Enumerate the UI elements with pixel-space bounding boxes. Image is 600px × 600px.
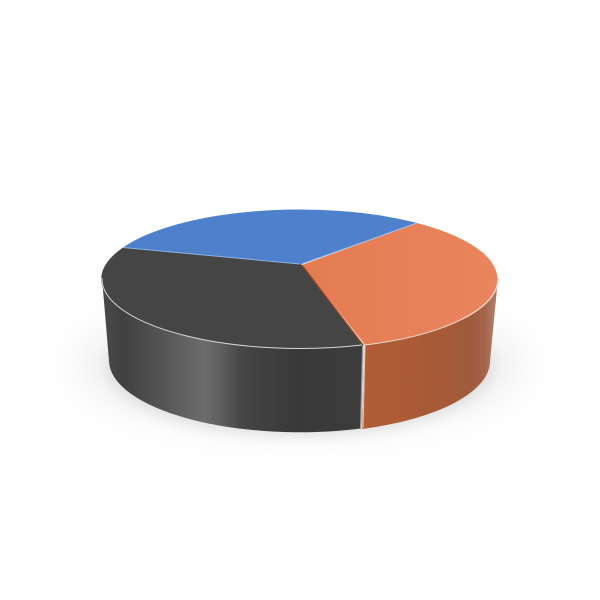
top face: blue slice: [123, 209, 417, 264]
top face: orange slice: [302, 223, 497, 344]
ground shadow: [75, 296, 525, 436]
side wall: orange slice: [362, 278, 498, 429]
slice edge highlights: [102, 223, 498, 428]
slice seam on the side wall: [360, 346, 362, 429]
side wall: gray slice: [102, 278, 363, 432]
top face: dark gray slice: [101, 248, 363, 349]
